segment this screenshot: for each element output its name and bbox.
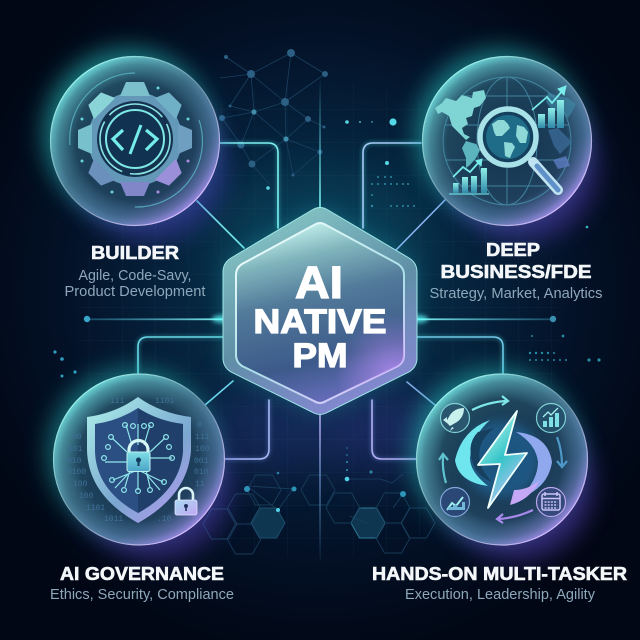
panel: ai governance [48,368,234,603]
text: builder details: Agile, Code-Savy, [78,268,192,284]
binary digits: 100 [73,480,88,489]
dot clusters [53,118,601,378]
binary digits: 100 [79,492,94,501]
connector lines [84,80,556,565]
binary digits: 100 [195,445,210,454]
panel: deep business [416,49,602,302]
binary digits: 1011 [104,515,123,524]
title: AI Native PM [254,257,386,375]
binary digits: 00 [72,433,82,442]
hexagon mesh: bottom right [301,447,435,553]
icon: gear with code symbol [70,73,202,207]
binary digits: 0100 [67,468,86,477]
binary digits: 010 [194,468,209,477]
title: AI Native PM: AI [295,257,343,308]
binary digits: .10 [157,515,172,524]
text: builder details [64,268,206,300]
binary digits: 001 [194,457,209,466]
icon: rocket badge [440,404,470,432]
icon: lightning bolt with swirl [455,411,552,508]
network graph decoration [219,49,328,185]
heading: deep business [440,240,592,282]
heading: hands-on multi-tasker: HANDS-ON MULTI-TASKER [372,564,627,584]
text: hands-on details: Execution, Leadership, Agility [405,587,596,603]
binary digits [67,397,210,524]
panel: hands-on multi-tasker [372,368,627,603]
binary digits: 0 [197,421,202,430]
title: AI Native PM: PM [292,337,348,375]
icon: bar chart badge [536,404,566,432]
panel: builder [44,49,226,300]
icon: cycle arrows [439,396,567,523]
binary digits: 11 [195,480,205,489]
binary digits: 010 [67,457,82,466]
heading: deep business: DEEP [486,240,540,260]
title: AI Native PM: NATIVE [254,303,386,341]
binary digits: 101 [68,445,83,454]
icon: shield with lock [87,397,197,523]
binary digits: 111 [110,397,125,406]
icon: calendar badge [536,488,566,516]
icon: growth chart badge [440,488,470,516]
hexagon mesh: bottom left [203,472,296,554]
heading: builder: BUILDER [91,243,179,263]
binary digits: 1101 [86,504,105,513]
icon: globe, magnifier and charts [435,77,576,205]
center hexagon [223,208,417,414]
text: builder details: Product Development [64,284,206,300]
text: ai governance details: Ethics, Security, Compliance [50,587,234,603]
binary digits: 1101 [155,397,174,406]
binary digits: 111 [195,433,210,442]
heading: deep business: BUSINESS/FDE [440,262,592,282]
heading: ai governance: AI GOVERNANCE [60,564,224,584]
text: deep business details: Strategy, Market, Analytics [430,286,602,302]
